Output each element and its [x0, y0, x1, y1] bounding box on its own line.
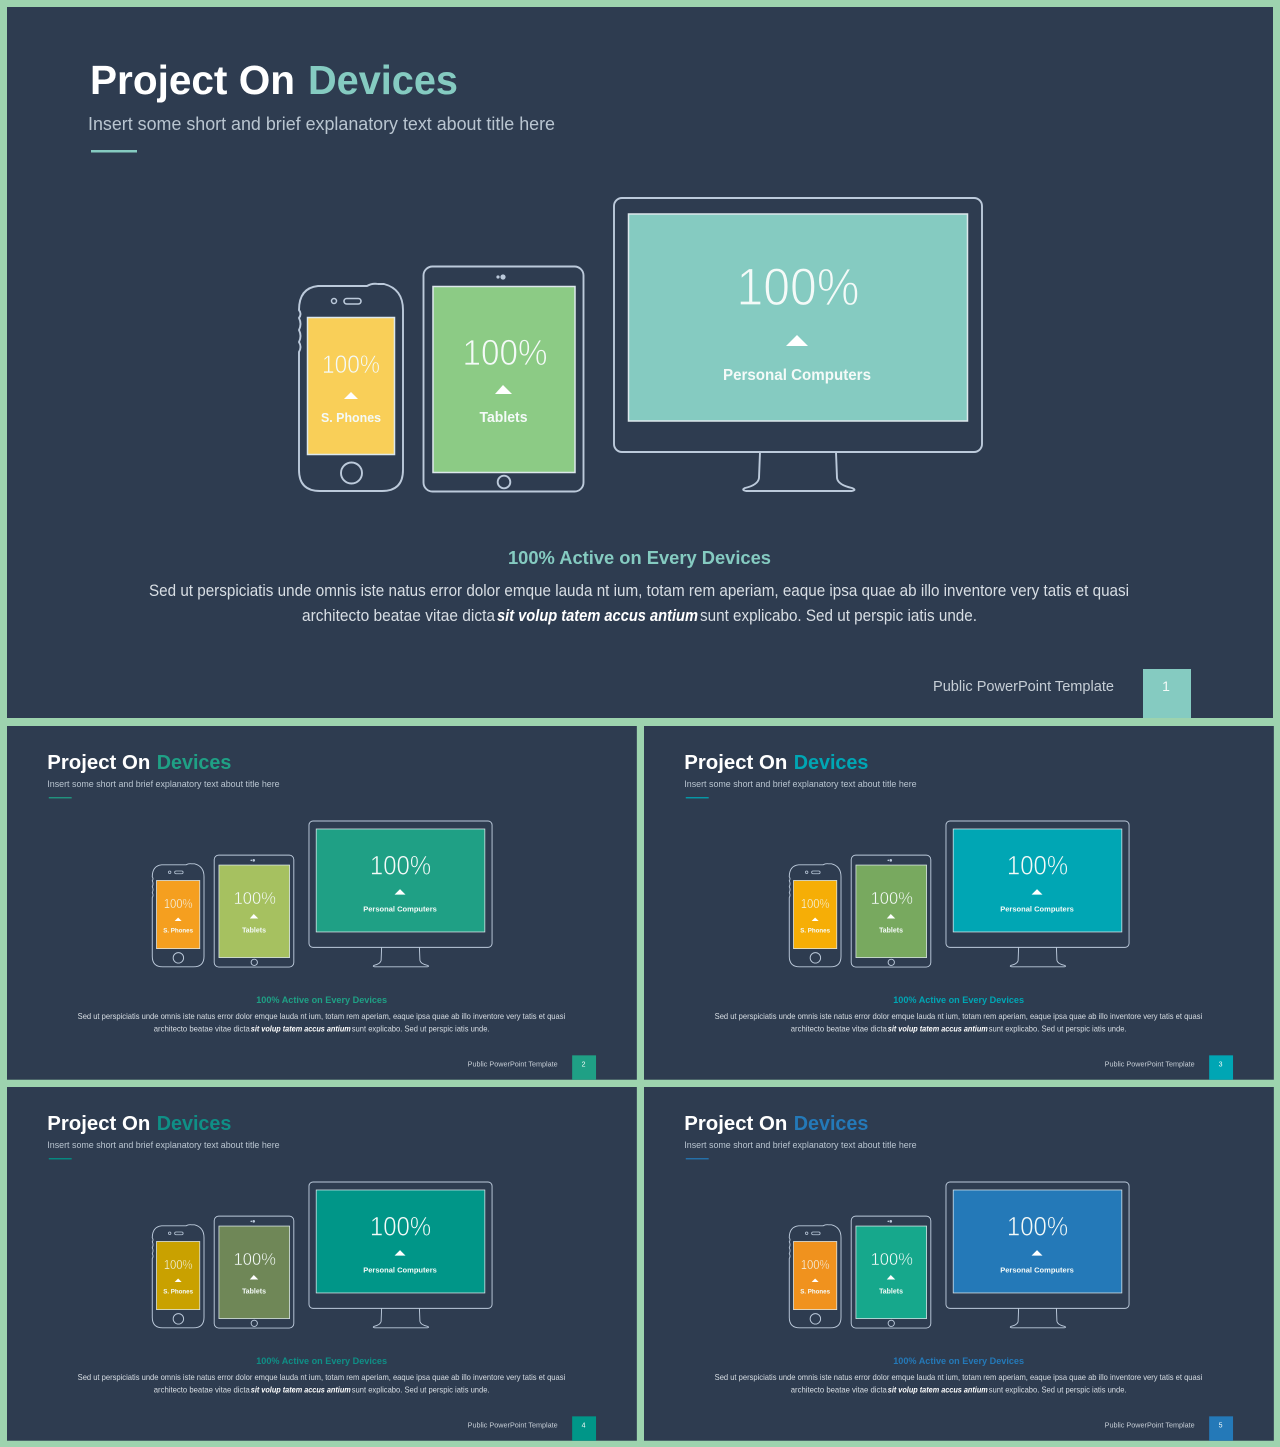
footer label: Public PowerPoint Template — [933, 678, 1114, 695]
device: smartphone: 100% — [801, 1258, 830, 1272]
page number badge — [1209, 1416, 1233, 1441]
device: desktop monitor: 100% — [370, 1211, 431, 1241]
footer label: Public PowerPoint Template — [1105, 1059, 1195, 1068]
title — [684, 752, 868, 774]
title underline — [49, 797, 72, 798]
device: tablet — [851, 1216, 931, 1328]
device: tablet: Tablets — [242, 925, 266, 934]
body text: architecto beatae vitae dicta — [154, 1385, 250, 1394]
device: desktop monitor: Personal Computers — [723, 367, 871, 384]
device: smartphone — [152, 864, 204, 967]
title underline — [91, 150, 137, 152]
device: smartphone: 100% — [801, 897, 830, 911]
footer label: Public PowerPoint Template — [1105, 1420, 1195, 1429]
device: tablet — [851, 855, 931, 967]
device: smartphone: S. Phones — [321, 411, 381, 425]
device: tablet: 100% — [462, 332, 548, 373]
title: Project On — [684, 752, 787, 774]
device: smartphone: 100% — [322, 351, 380, 379]
title: Devices — [794, 1113, 868, 1135]
device: desktop monitor — [614, 198, 982, 491]
slide background — [7, 1087, 637, 1441]
device: desktop monitor: 100% — [370, 850, 431, 880]
panel: slide 3 — [644, 726, 1274, 1080]
panel: slide 5 — [644, 1087, 1274, 1441]
slide background — [7, 726, 637, 1080]
footer label: Public PowerPoint Template — [468, 1420, 558, 1429]
subtitle: Insert some short and brief explanatory text about title here — [684, 1140, 917, 1150]
device: tablet: 100% — [871, 888, 913, 908]
body text: architecto beatae vitae dicta — [302, 607, 496, 625]
subtitle: Insert some short and brief explanatory text about title here — [88, 114, 555, 134]
device: tablet: 100% — [871, 1249, 913, 1269]
device: desktop monitor: Personal Computers — [1000, 905, 1074, 914]
device: desktop monitor — [309, 1182, 492, 1328]
page number badge: 1 — [1162, 678, 1170, 694]
title underline — [49, 1158, 72, 1159]
device: smartphone: S. Phones — [163, 927, 194, 934]
device: desktop monitor — [946, 1182, 1129, 1328]
title: Project On — [47, 1113, 150, 1135]
device: smartphone — [789, 864, 841, 967]
slide background — [7, 7, 1273, 718]
page number badge: 4 — [582, 1422, 586, 1429]
device: desktop monitor: Personal Computers — [363, 905, 437, 914]
page number badge: 5 — [1219, 1422, 1223, 1429]
body text: sunt explicabo. Sed ut perspic iatis unde. — [989, 1385, 1127, 1394]
body text — [78, 1373, 565, 1394]
title — [90, 57, 458, 103]
body text: Sed ut perspiciatis unde omnis iste natus error dolor emque lauda nt ium, totam rem aperiam, eaque ipsa quae ab illo inventore very tatis et quasi — [78, 1012, 565, 1021]
footer label: Public PowerPoint Template — [468, 1059, 558, 1068]
title — [47, 752, 231, 774]
title: Devices — [308, 57, 458, 103]
device: desktop monitor: 100% — [736, 258, 860, 317]
body text: sit volup tatem accus antium — [251, 1024, 351, 1033]
device: tablet — [214, 855, 294, 967]
title: Project On — [90, 57, 295, 103]
device: tablet — [214, 1216, 294, 1328]
slide background — [644, 726, 1274, 1080]
body text: sunt explicabo. Sed ut perspic iatis unde. — [700, 607, 977, 625]
device: tablet: 100% — [234, 888, 276, 908]
device: desktop monitor: Personal Computers — [1000, 1266, 1074, 1275]
section heading: 100% Active on Every Devices — [893, 995, 1024, 1005]
device: smartphone: S. Phones — [800, 927, 831, 934]
body text — [78, 1012, 565, 1033]
page number badge — [572, 1055, 596, 1080]
section heading: 100% Active on Every Devices — [508, 548, 771, 568]
page number badge: 2 — [582, 1061, 586, 1068]
title — [47, 1113, 231, 1135]
section heading: 100% Active on Every Devices — [256, 995, 387, 1005]
device: smartphone: 100% — [164, 897, 193, 911]
page number badge — [1143, 669, 1191, 718]
device: desktop monitor: 100% — [1007, 850, 1068, 880]
device: desktop monitor: 100% — [1007, 1211, 1068, 1241]
page number badge: 3 — [1219, 1061, 1223, 1068]
subtitle: Insert some short and brief explanatory text about title here — [47, 1140, 280, 1150]
device: tablet: Tablets — [480, 410, 528, 426]
device: smartphone — [299, 284, 403, 491]
body text — [715, 1012, 1202, 1033]
title: Devices — [157, 1113, 231, 1135]
title: Project On — [684, 1113, 787, 1135]
body text: Sed ut perspiciatis unde omnis iste natus error dolor emque lauda nt ium, totam rem aperiam, eaque ipsa quae ab illo inventore very tatis et quasi — [715, 1012, 1202, 1021]
body text — [149, 582, 1129, 625]
subtitle: Insert some short and brief explanatory text about title here — [684, 779, 917, 789]
section heading: 100% Active on Every Devices — [893, 1356, 1024, 1366]
device: desktop monitor — [946, 821, 1129, 967]
device: smartphone — [789, 1225, 841, 1328]
title — [684, 1113, 868, 1135]
device: tablet: Tablets — [879, 925, 903, 934]
body text: sit volup tatem accus antium — [888, 1385, 988, 1394]
body text: sit volup tatem accus antium — [251, 1385, 351, 1394]
panel: slide 2 — [7, 726, 637, 1080]
device: desktop monitor — [309, 821, 492, 967]
title: Project On — [47, 752, 150, 774]
page number badge — [572, 1416, 596, 1441]
title underline — [686, 1158, 709, 1159]
body text — [715, 1373, 1202, 1394]
body text: Sed ut perspiciatis unde omnis iste natus error dolor emque lauda nt ium, totam rem aperiam, eaque ipsa quae ab illo inventore very tatis et quasi — [149, 582, 1129, 600]
body text: sit volup tatem accus antium — [497, 607, 698, 625]
page number badge — [1209, 1055, 1233, 1080]
device: tablet — [424, 266, 584, 492]
device: smartphone: S. Phones — [163, 1288, 194, 1295]
device: tablet: Tablets — [879, 1286, 903, 1295]
device: smartphone: S. Phones — [800, 1288, 831, 1295]
device: smartphone: 100% — [164, 1258, 193, 1272]
section heading: 100% Active on Every Devices — [256, 1356, 387, 1366]
panel: slide 4 — [7, 1087, 637, 1441]
device: desktop monitor: Personal Computers — [363, 1266, 437, 1275]
body text: sunt explicabo. Sed ut perspic iatis unde. — [352, 1024, 490, 1033]
slide background — [644, 1087, 1274, 1441]
body text: sunt explicabo. Sed ut perspic iatis unde. — [989, 1024, 1127, 1033]
subtitle: Insert some short and brief explanatory text about title here — [47, 779, 280, 789]
title underline — [686, 797, 709, 798]
body text: sunt explicabo. Sed ut perspic iatis unde. — [352, 1385, 490, 1394]
title: Devices — [794, 752, 868, 774]
body text: Sed ut perspiciatis unde omnis iste natus error dolor emque lauda nt ium, totam rem aperiam, eaque ipsa quae ab illo inventore very tatis et quasi — [715, 1373, 1202, 1382]
body text: architecto beatae vitae dicta — [154, 1024, 250, 1033]
title: Devices — [157, 752, 231, 774]
body text: Sed ut perspiciatis unde omnis iste natus error dolor emque lauda nt ium, totam rem aperiam, eaque ipsa quae ab illo inventore very tatis et quasi — [78, 1373, 565, 1382]
device: smartphone — [152, 1225, 204, 1328]
body text: architecto beatae vitae dicta — [791, 1024, 887, 1033]
body text: sit volup tatem accus antium — [888, 1024, 988, 1033]
body text: architecto beatae vitae dicta — [791, 1385, 887, 1394]
device: tablet: Tablets — [242, 1286, 266, 1295]
panel: main slide 1 — [7, 7, 1273, 718]
device: tablet: 100% — [234, 1249, 276, 1269]
